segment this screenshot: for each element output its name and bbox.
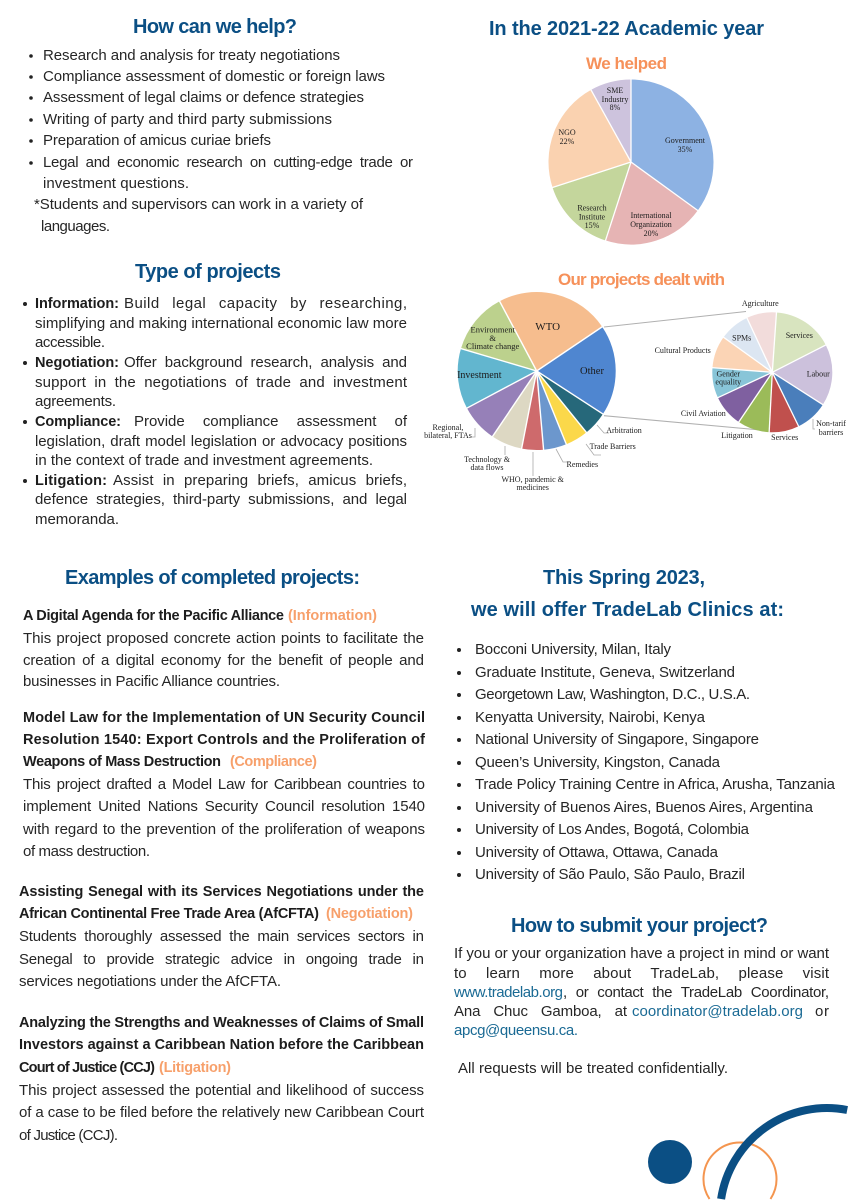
pie labels with leader lines: WHO, pandemic &: [501, 475, 565, 484]
project: caribbean court: of Justice (CCJ).: [19, 1127, 118, 1144]
project: digital agenda: businesses in Pacific Alliance countries.: [23, 673, 280, 690]
labels: other breakdown: Services: [771, 433, 798, 442]
bullet list: how can we help: [29, 47, 413, 192]
heading: type of projects: Type of projects: [135, 261, 281, 283]
text: submission contact: to learn more about TradeLab, please visit: [454, 965, 830, 982]
project type list: Information:: [35, 296, 119, 312]
text: submission contact: coordinator@tradelab.org: [632, 1003, 803, 1020]
project: caribbean court: This project assessed the potential and likelihood of success: [19, 1082, 424, 1099]
project: caribbean court: Analyzing the Strengths and Weaknesses of Claims of Small: [19, 1015, 424, 1031]
labels: other breakdown: Civil Aviation: [681, 409, 726, 418]
pie labels with leader lines: Arbitration: [606, 426, 642, 435]
bullet list: how can we help: Compliance assessment of domestic or foreign laws: [43, 68, 385, 85]
project: model law: (Compliance): [230, 754, 317, 770]
bullet list: how can we help: Writing of party and third party submissions: [43, 111, 332, 128]
pie labels with leader lines: bilateral, FTAs: [424, 431, 472, 440]
project: model law: [22, 710, 425, 860]
project: model law: implement United Nations Security Council resolution 1540: [23, 798, 425, 815]
pie chart: we helped: International: [631, 211, 672, 220]
project: caribbean court: (Litigation): [159, 1060, 231, 1076]
heading: in the 2021-22 academic year: In the 2021-22 Academic year: [489, 18, 764, 40]
pie chart: our projects dealt with: WTO: [535, 321, 560, 333]
project type list: [23, 295, 408, 528]
project type list: memoranda.: [35, 511, 119, 528]
list: clinic universities: Bocconi University, Milan, Italy: [475, 641, 672, 658]
pie chart: we helped: 22%: [560, 137, 575, 146]
text: submission contact: , or contact the TradeLab Coordinator,: [563, 984, 829, 1001]
chart title: we helped: We helped: [586, 54, 667, 73]
text: submission contact: or: [815, 1003, 829, 1020]
project: model law: This project drafted a Model Law for Caribbean countries to: [23, 776, 425, 793]
text: submission contact: apcg@queensu.ca.: [454, 1022, 578, 1039]
project: model law: Weapons of Mass Destruction: [23, 754, 221, 770]
labels: other breakdown: Agriculture: [742, 299, 779, 308]
project: senegal services: Senegal to provide strategic advice in ongoing trade in: [19, 951, 424, 968]
project: caribbean court: [19, 1015, 425, 1144]
pie chart: we helped: Government: [665, 136, 706, 145]
pie labels with leader lines: data flows: [470, 463, 504, 472]
labels: other breakdown: barriers: [819, 428, 843, 437]
project type list: defence strategies, third-party submissions, and legal: [35, 491, 407, 508]
connector lines between pies: [604, 312, 768, 431]
project type list: agreements.: [35, 393, 116, 410]
project type list: Compliance:: [35, 414, 121, 430]
pie chart: we helped: Institute: [579, 212, 606, 222]
pie labels with leader lines: Regional,: [433, 423, 463, 432]
list: clinic universities: University of Buenos Aires, Buenos Aires, Argentina: [475, 799, 814, 816]
project: caribbean court: Court of Justice (CCJ): [19, 1060, 155, 1076]
pie chart: we helped: [552, 79, 706, 241]
pie chart: our projects dealt with: Investment: [457, 370, 502, 381]
list: clinic universities: University of Ottawa, Ottawa, Canada: [475, 844, 719, 861]
pie chart: we helped: SME: [607, 86, 623, 95]
project type list: Offer background research, analysis and: [124, 354, 407, 371]
bullet list: how can we help: Preparation of amicus curiae briefs: [43, 132, 271, 149]
pie chart: our projects dealt with: Environment: [471, 324, 516, 334]
labels: other breakdown: [655, 299, 846, 442]
pie labels with leader lines: Trade Barriers: [590, 442, 636, 451]
list: clinic universities: University of São Paulo, São Paulo, Brazil: [475, 866, 745, 883]
pie chart: our projects dealt with: Other: [580, 366, 604, 377]
heading: this spring 2023 clinics: This Spring 2023,: [543, 567, 705, 589]
pie labels with leader lines: Remedies: [567, 460, 598, 469]
text: submission contact: www.tradelab.org: [453, 984, 563, 1001]
pie chart: we helped: 15%: [585, 221, 600, 230]
pie chart: our projects dealt with: Climate change: [466, 341, 519, 351]
pie labels with leader lines: [424, 423, 642, 492]
project: digital agenda: This project proposed concrete action points to facilitate the: [23, 630, 424, 647]
project: model law: with regard to the prevention of the proliferation of weapons: [22, 821, 425, 838]
project: senegal services: African Continental Free Trade Area (AfCFTA): [19, 906, 319, 922]
list: clinic universities: Queen’s University, Kingston, Canada: [475, 754, 721, 771]
project: digital agenda: [23, 608, 424, 690]
heading: examples of completed projects: Examples of completed projects:: [65, 567, 360, 589]
project: caribbean court: of a case to be filed before the relatively new Caribbean Court: [19, 1104, 425, 1121]
note: students and supervisors: [34, 196, 364, 235]
list: clinic universities: Kenyatta University, Nairobi, Kenya: [475, 709, 706, 726]
pie chart: our projects dealt with: &: [489, 333, 496, 343]
pie chart: other breakdown: Gender: [717, 369, 740, 378]
project type list: legislation, draft model legislation or advocacy positions: [35, 433, 407, 450]
pie chart: we helped: Industry: [602, 95, 628, 104]
project: senegal services: Assisting Senegal with its Services Negotiations under the: [19, 884, 424, 900]
heading: this spring 2023 clinics: [470, 567, 784, 621]
project type list: accessible.: [35, 334, 105, 351]
list: clinic universities: Trade Policy Training Centre in Africa, Arusha, Tanzania: [475, 776, 836, 793]
pie chart: we helped: 8%: [610, 103, 621, 112]
heading: how to submit your project: How to submit your project?: [511, 915, 768, 937]
pie chart: we helped: Organization: [630, 220, 672, 229]
project: senegal services: services negotiations under the AfCFTA.: [19, 973, 281, 990]
pie chart: other breakdown: [711, 311, 830, 433]
chart title: our projects dealt with: Our projects dealt with: [558, 270, 725, 289]
project type list: support in the negotiations of trade and investment: [35, 374, 408, 391]
pie chart: we helped: NGO: [558, 128, 576, 137]
pie chart: other breakdown: SPMs: [732, 333, 751, 342]
list: clinic universities: Graduate Institute, Geneva, Switzerland: [475, 664, 735, 681]
note: students and supervisors: languages.: [41, 218, 110, 235]
labels: other breakdown: Litigation: [721, 431, 753, 440]
decoration: circles and arc: [648, 1108, 847, 1199]
bullet list: how can we help: investment questions.: [43, 175, 189, 192]
labels: other breakdown: Non-tarif: [816, 419, 846, 428]
project: model law: of mass destruction.: [23, 843, 150, 860]
text: confidentiality note: All requests will be treated confidentially.: [458, 1060, 728, 1077]
project: digital agenda: (Information): [288, 608, 377, 624]
note: students and supervisors: *Students and supervisors can work in a variety of: [34, 196, 364, 213]
pie chart: other breakdown: Services: [786, 331, 813, 340]
project type list: Litigation:: [35, 473, 107, 489]
pie chart: we helped: 35%: [678, 145, 693, 154]
project type list: Assist in preparing briefs, amicus briefs,: [113, 472, 407, 489]
project type list: Build legal capacity by researching,: [124, 295, 407, 312]
pie chart: our projects dealt with: [457, 300, 604, 451]
pie chart: we helped: Research: [577, 204, 607, 212]
list: clinic universities: National University of Singapore, Singapore: [475, 731, 759, 748]
project type list: simplifying and making international economic law more: [35, 315, 407, 332]
project: digital agenda: creation of a digital economy for the benefit of people and: [23, 652, 424, 669]
text: submission contact: [453, 945, 830, 1039]
project type list: Negotiation:: [35, 355, 119, 371]
project: senegal services: (Negotiation): [326, 906, 413, 922]
project type list: in the context of trade and investment agreements.: [35, 452, 373, 469]
project: digital agenda: A Digital Agenda for the Pacific Alliance: [23, 608, 284, 624]
text: submission contact: If you or your organization have a project in mind or want: [454, 945, 830, 962]
heading: this spring 2023 clinics: we will offer TradeLab Clinics at:: [470, 599, 784, 621]
bullet list: how can we help: Research and analysis for treaty negotiations: [43, 47, 340, 64]
pie chart: other breakdown: Labour: [807, 369, 830, 378]
pie labels with leader lines: medicines: [516, 483, 549, 492]
project: senegal services: Students thoroughly assessed the main services sectors in: [19, 928, 424, 945]
pie chart: we helped: 20%: [644, 229, 659, 238]
bullet list: how can we help: Assessment of legal claims or defence strategies: [43, 89, 364, 106]
list: clinic universities: Georgetown Law, Washington, D.C., U.S.A.: [475, 686, 750, 703]
heading: how can we help: How can we help?: [133, 16, 297, 38]
text: submission contact: Ana Chuc Gamboa, at: [454, 1003, 628, 1020]
project: senegal services: [19, 884, 424, 990]
pie labels with leader lines: Technology &: [464, 455, 511, 464]
bullet list: how can we help: Legal and economic research on cutting-edge trade or: [43, 154, 413, 171]
project: model law: Model Law for the Implementation of UN Security Council: [23, 710, 425, 726]
list: clinic universities: University of Los Andes, Bogotá, Colombia: [475, 821, 750, 838]
project type list: Provide compliance assessment of: [134, 413, 408, 430]
project: model law: Resolution 1540: Export Controls and the Proliferation of: [23, 732, 425, 748]
project: caribbean court: Investors against a Caribbean Nation before the Caribbean: [19, 1037, 424, 1053]
list: clinic universities: [457, 641, 836, 883]
labels: other breakdown: Cultural Products: [655, 346, 711, 355]
pie chart: other breakdown: equality: [715, 377, 741, 386]
